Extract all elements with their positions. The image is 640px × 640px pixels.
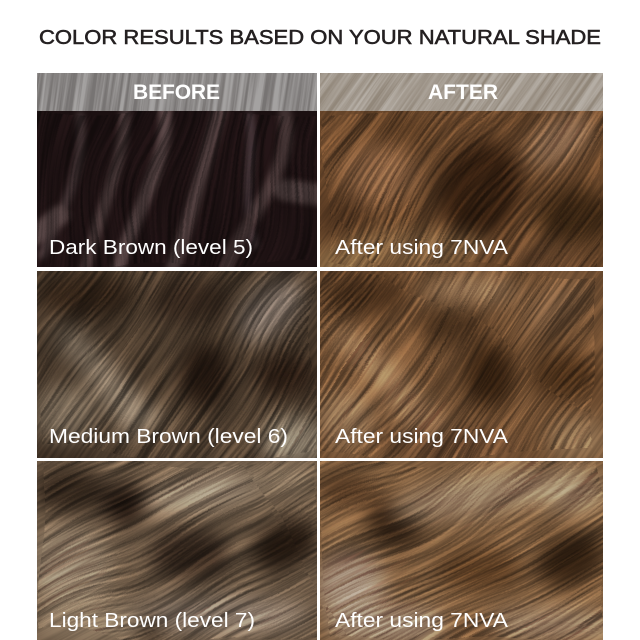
before header band [37,73,317,111]
title: COLOR RESULTS BASED ON YOUR NATURAL SHADE [39,27,601,49]
label: after using 7NVA, row two: After using 7NVA [335,426,509,448]
label: medium brown: Medium Brown (level 6) [49,426,288,448]
before header band: BEFORE [133,81,220,104]
after header band [320,73,603,111]
panel: after, row three [315,460,620,640]
label: after using 7NVA, row three: After using 7NVA [335,610,509,632]
label: light brown: Light Brown (level 7) [49,610,255,632]
label: dark brown: Dark Brown (level 5) [49,237,253,259]
label: after using 7NVA, row one: After using 7NVA [335,237,509,259]
after header band: AFTER [428,81,498,104]
panel: after, row two [320,271,603,458]
panel: before, light brown [30,460,328,640]
panel: before, dark brown [35,73,320,270]
panel: after, row one [320,73,603,267]
panel: before, medium brown [37,271,317,458]
